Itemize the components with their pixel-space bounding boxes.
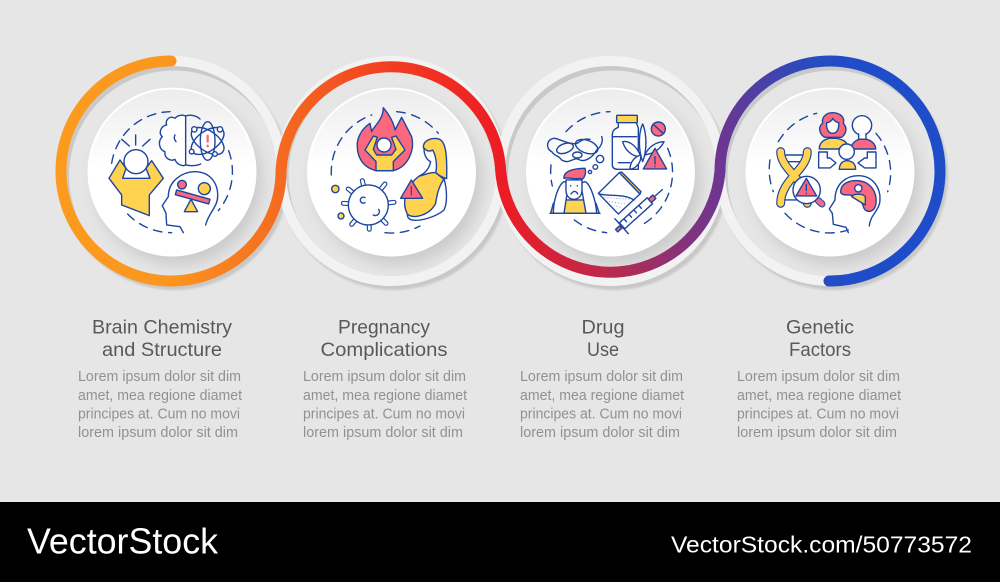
step 3 text: amet, mea regione diamet: [520, 388, 684, 404]
icon: brain chemistry: [109, 112, 232, 233]
base ring 1: [56, 56, 290, 290]
step 4 text: lorem ipsum dolor sit dim: [737, 425, 897, 441]
step 4 text: amet, mea regione diamet: [737, 388, 901, 404]
step 3 text: principes at. Cum no movi: [520, 406, 682, 422]
step 2 text: Lorem ipsum dolor sit dim: [303, 369, 466, 385]
step 4 text: [737, 316, 901, 441]
step 1 text: amet, mea regione diamet: [78, 388, 242, 404]
step 2 text: amet, mea regione diamet: [303, 388, 467, 404]
base ring 3: [496, 56, 728, 290]
step 4 text: principes at. Cum no movi: [737, 406, 899, 422]
step 2 text: Pregnancy: [338, 316, 430, 338]
step 1 text: principes at. Cum no movi: [78, 406, 240, 422]
step 3 text: Lorem ipsum dolor sit dim: [520, 369, 683, 385]
icon: pregnancy complications: [331, 108, 447, 233]
step 2 text: principes at. Cum no movi: [303, 406, 465, 422]
step 4 text: Lorem ipsum dolor sit dim: [737, 369, 900, 385]
base ring 2: [276, 56, 509, 290]
footer bar: VectorStock.com/50773572: [671, 532, 972, 558]
step 4 text: Genetic: [786, 316, 854, 338]
step 3 text: Drug: [582, 316, 624, 338]
icon: drug use: [548, 112, 673, 238]
gradient flow line: [61, 61, 940, 281]
footer bar: VectorStock: [27, 520, 219, 562]
step 1 text: Brain Chemistry: [92, 316, 232, 338]
step 3 text: lorem ipsum dolor sit dim: [520, 425, 680, 441]
step 2 text: Complications: [320, 339, 448, 361]
icon: genetic factors: [769, 113, 891, 233]
step 1 text: [78, 316, 242, 441]
step 3 text: [520, 316, 684, 441]
footer bar: [0, 502, 1000, 582]
step 2 text: [303, 316, 467, 441]
step 3 text: Use: [587, 339, 619, 361]
base ring 4: [715, 56, 948, 290]
step 1 text: lorem ipsum dolor sit dim: [78, 425, 238, 441]
step 4 text: Factors: [789, 339, 851, 361]
step 1 text: and Structure: [102, 339, 222, 361]
step 2 text: lorem ipsum dolor sit dim: [303, 425, 463, 441]
step 1 text: Lorem ipsum dolor sit dim: [78, 369, 241, 385]
